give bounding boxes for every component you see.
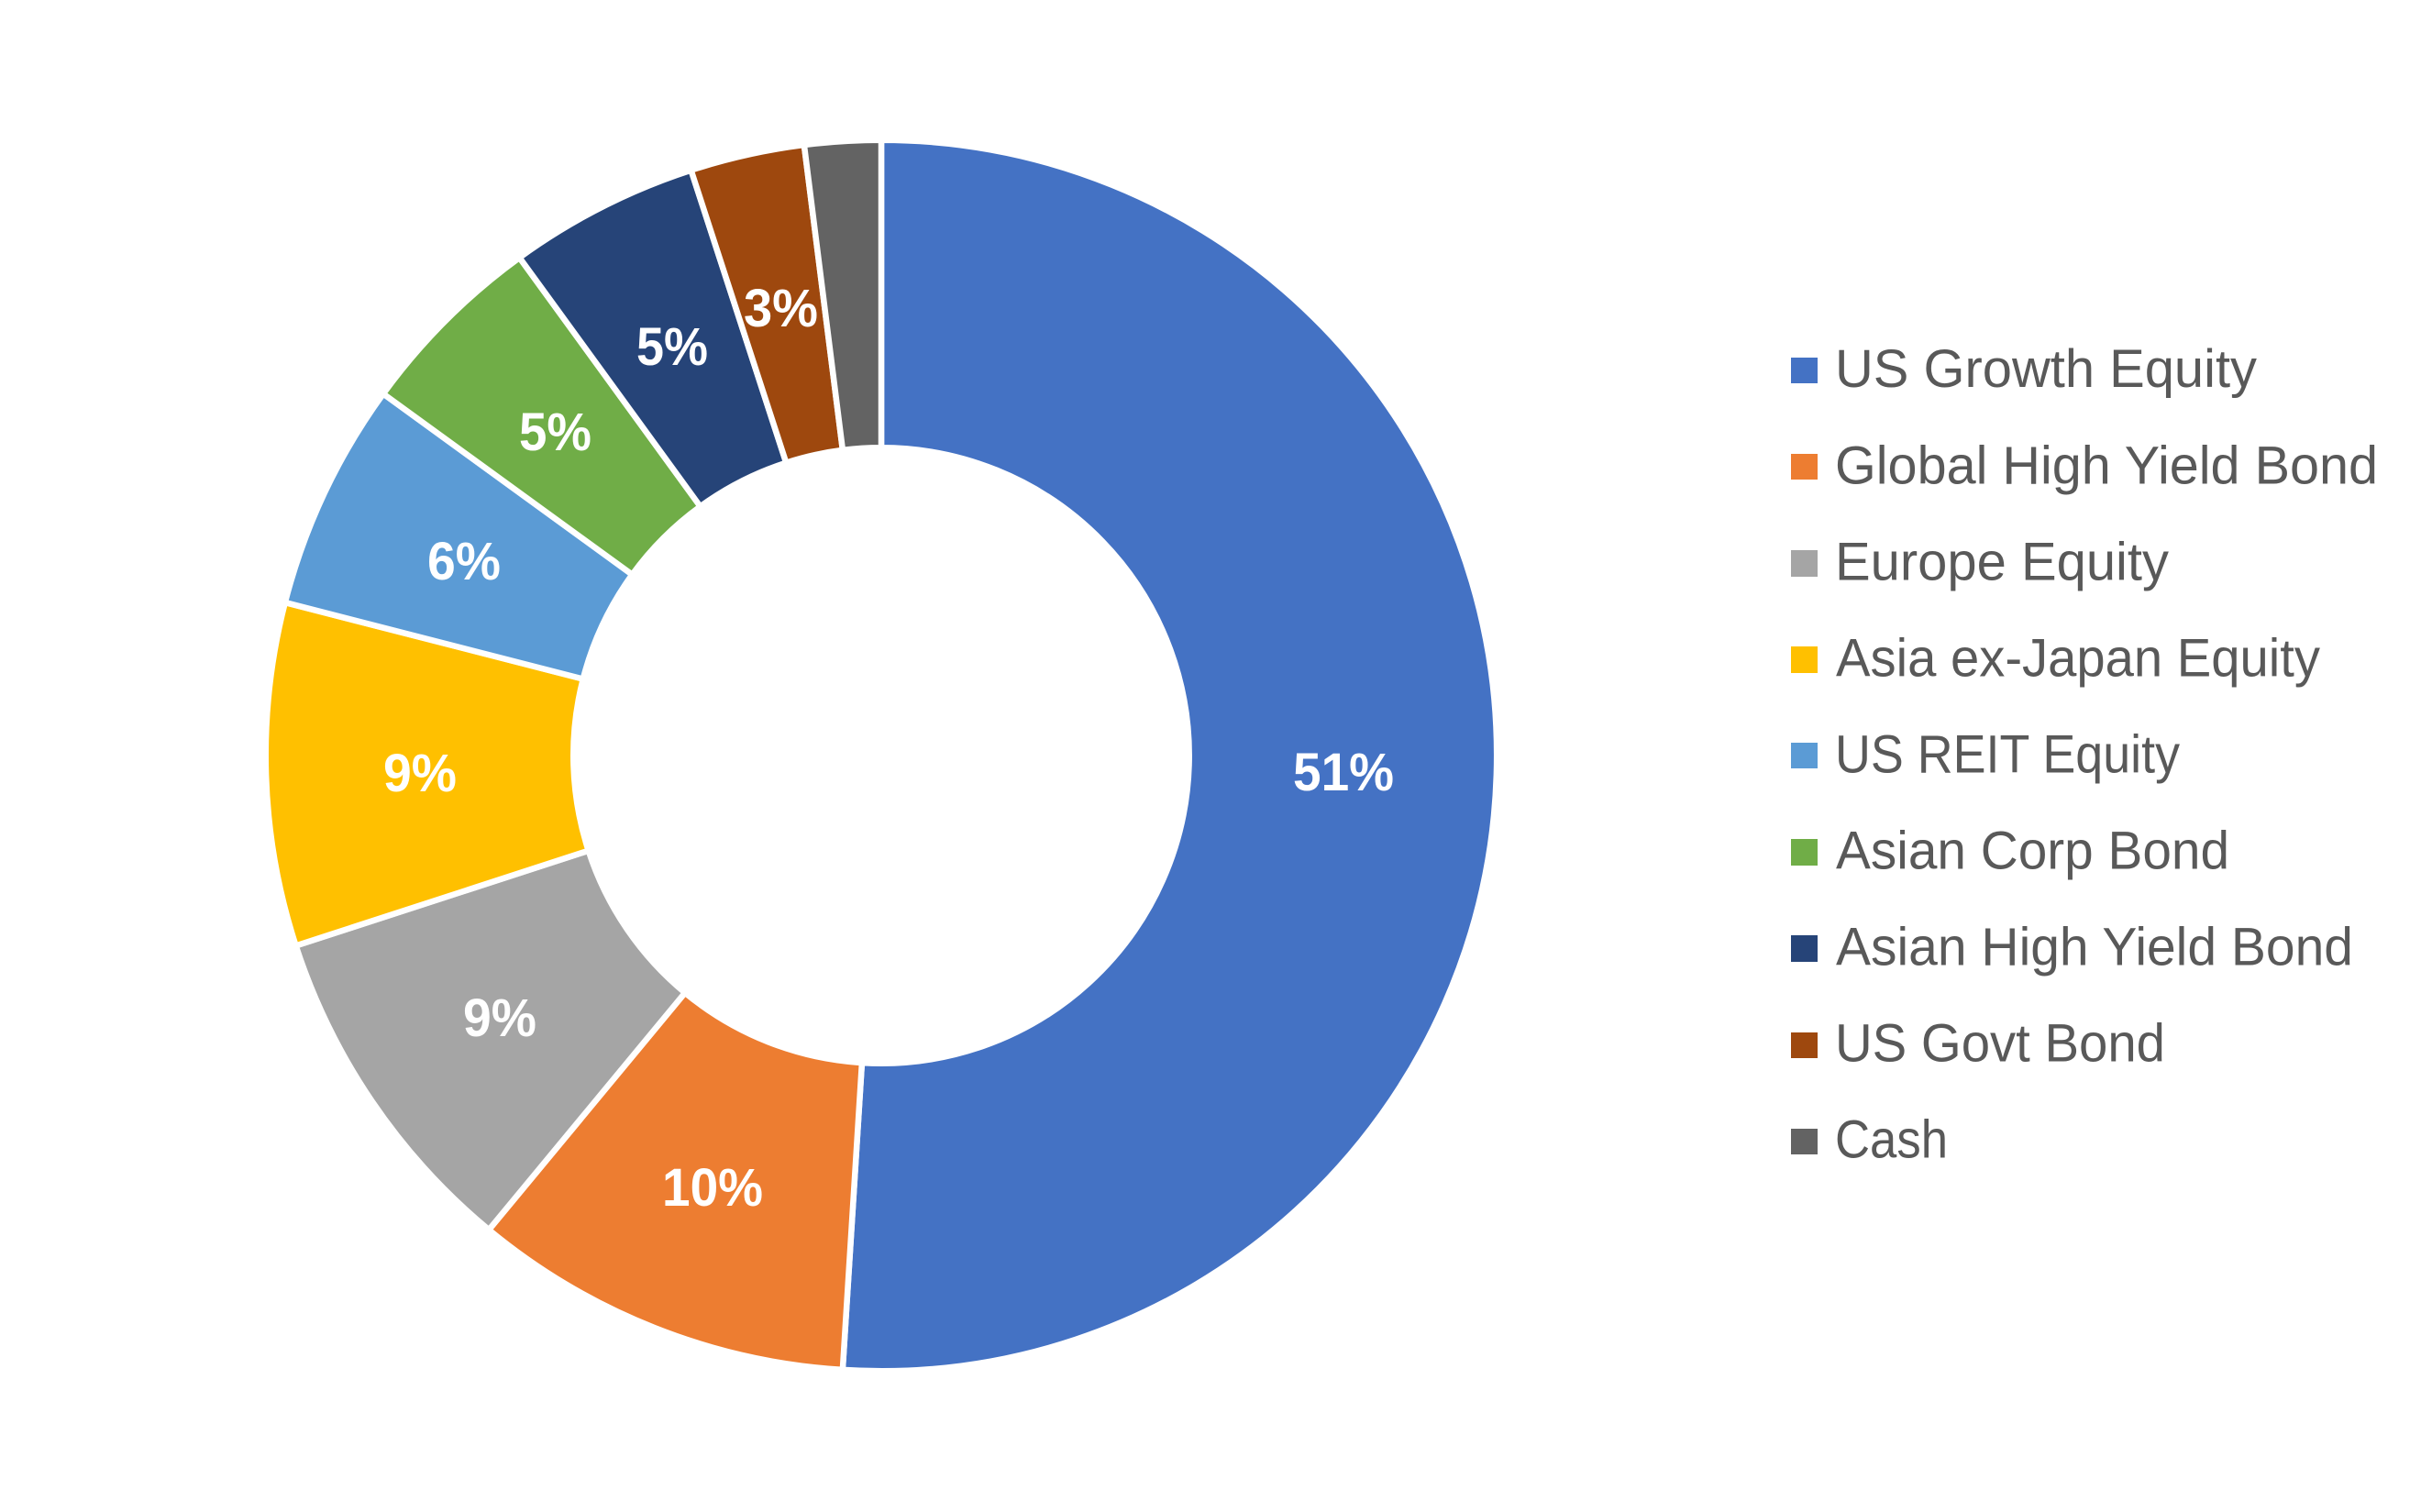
label: 6%: 6% bbox=[427, 532, 501, 591]
segment: Global High Yield Bond 10% bbox=[489, 993, 862, 1370]
segment: Cash 2% bbox=[804, 140, 881, 450]
segment: US Growth Equity 51% bbox=[843, 140, 1497, 1371]
legend item: Cash: Cash bbox=[1835, 1109, 1948, 1170]
legend item: US Growth Equity: US Growth Equity bbox=[1835, 339, 2257, 399]
label: 51%: 51% bbox=[1293, 743, 1394, 802]
legend item: Global High Yield Bond: Global High Yield Bond bbox=[1835, 436, 2378, 495]
legend item: Cash bbox=[1791, 1109, 1948, 1170]
label: 3%: 3% bbox=[744, 279, 818, 338]
legend item: Asian High Yield Bond: Asian High Yield Bond bbox=[1836, 917, 2353, 977]
label: 9% Europe Equity: 9% bbox=[463, 988, 536, 1048]
legend item: US REIT Equity: US REIT Equity bbox=[1835, 724, 2180, 785]
legend item: Asia ex-Japan Equity: Asia ex-Japan Equity bbox=[1836, 629, 2320, 688]
label: 5% Asian Corp Bond: 5% bbox=[519, 403, 591, 462]
segment: Asian Corp Bond 5% bbox=[383, 258, 701, 575]
label: 5% Asian High Yield Bond: 5% bbox=[636, 317, 708, 377]
legend item: US Govt Bond: US Govt Bond bbox=[1835, 1014, 2165, 1073]
donut chart bbox=[266, 140, 1497, 1371]
legend item: Europe Equity: Europe Equity bbox=[1835, 532, 2169, 592]
label: 9% Asia ex-Japan Equity: 9% bbox=[383, 744, 457, 803]
data labels bbox=[383, 279, 1394, 1218]
segment: Asia ex-Japan Equity 9% bbox=[266, 602, 589, 945]
segment: US Govt Bond 3% bbox=[691, 145, 843, 463]
label: 10%: 10% bbox=[662, 1158, 763, 1218]
legend bbox=[1791, 339, 2378, 1170]
segment: Europe Equity 9% bbox=[296, 851, 685, 1230]
legend item: Asian Corp Bond: Asian Corp Bond bbox=[1836, 822, 2229, 880]
segment: Asian High Yield Bond 5% bbox=[519, 171, 786, 506]
segment: US REIT Equity 6% bbox=[285, 393, 632, 679]
